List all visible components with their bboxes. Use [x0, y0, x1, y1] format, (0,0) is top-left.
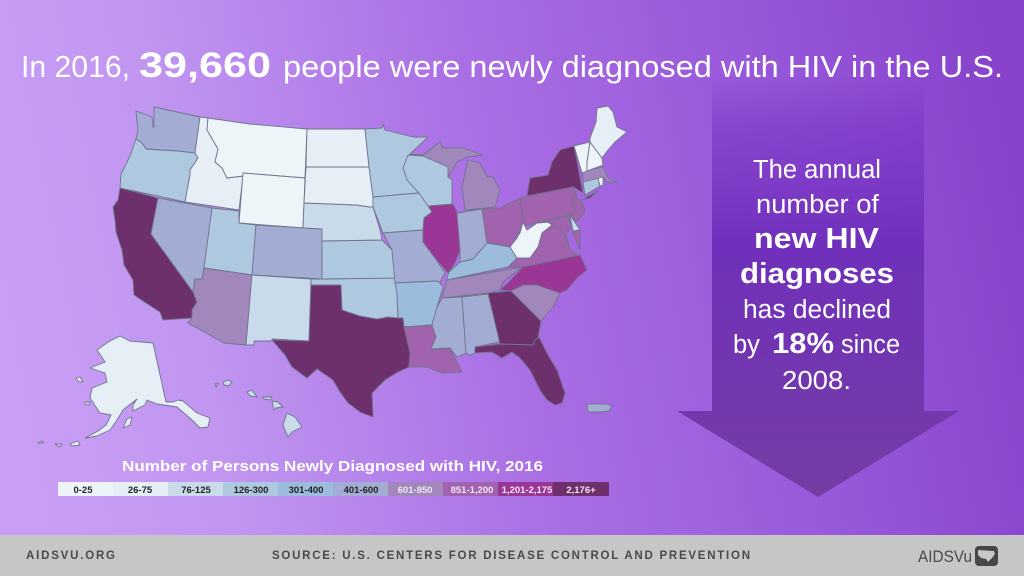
state: Alabama [462, 294, 500, 355]
territory: Puerto Rico [587, 404, 612, 412]
state: New Hampshire [587, 142, 603, 171]
islands: Alaska [38, 377, 132, 447]
state: New Jersey [570, 195, 585, 222]
state: Ohio [482, 198, 523, 247]
title: In 2016, [21, 49, 130, 84]
callout: annual decline: number of [756, 191, 880, 219]
state: Nevada [151, 198, 212, 292]
legend: 76-125 [181, 485, 212, 496]
legend: 2,176+ [566, 485, 596, 496]
state: Iowa [373, 193, 432, 233]
down arrow [677, 75, 959, 497]
callout: annual decline: has declined [743, 296, 891, 324]
state: Illinois [423, 204, 460, 273]
state: Maine [590, 106, 627, 158]
title [21, 46, 1003, 85]
state: Arizona [188, 268, 252, 345]
state: North Dakota [306, 129, 369, 167]
state: Louisiana [404, 325, 462, 373]
state: Colorado [252, 225, 322, 279]
state: Michigan [410, 142, 500, 210]
state: Wisconsin [403, 155, 452, 206]
legend: 601-850 [398, 485, 432, 496]
state: Minnesota [365, 124, 428, 197]
state: Nebraska [303, 203, 382, 241]
footer bar [0, 535, 1024, 576]
state: Rhode Island [598, 177, 603, 186]
state: Wyoming [239, 173, 305, 228]
legend: 26-75 [128, 485, 153, 496]
legend: 0-25 [73, 485, 93, 496]
title: 39,660 [139, 46, 271, 85]
state: Idaho [185, 117, 243, 210]
state: Utah [204, 208, 256, 275]
legend title: Number of Persons Newly Diagnosed with HIV, 2016 [122, 458, 543, 475]
state: Florida [475, 337, 565, 405]
state: Oklahoma [311, 278, 398, 319]
state: South Dakota [304, 167, 373, 207]
legend: 301-400 [289, 485, 323, 496]
footer: source: SOURCE: U.S. CENTERS FOR DISEASE CONTROL AND PREVENTION [272, 550, 750, 562]
legend: 126-300 [234, 485, 268, 496]
callout: annual decline: since [841, 331, 900, 359]
callout: annual decline: 18% [772, 328, 834, 360]
callout: annual decline: by [733, 331, 760, 359]
state: Pennsylvania [520, 187, 577, 226]
state: California [113, 188, 197, 320]
footer: website: AIDSVU.ORG [26, 550, 115, 562]
state: Oregon [120, 139, 198, 202]
legend: 851-1,200 [451, 485, 493, 496]
legend: 401-600 [344, 485, 378, 496]
state: West Virginia [510, 222, 552, 258]
callout: annual decline [733, 156, 900, 395]
state: Massachusetts [583, 167, 617, 182]
state: Washington [136, 107, 200, 153]
state: Texas [272, 285, 410, 417]
state: New York [527, 146, 583, 196]
state: Missouri [383, 230, 445, 287]
state: Mississippi [431, 297, 466, 357]
legend [58, 482, 609, 496]
callout: annual decline: diagnoses [740, 258, 894, 290]
state: Georgia [488, 291, 541, 345]
callout: annual decline: 2008. [782, 367, 851, 395]
state: Maryland [537, 216, 580, 250]
map: United States HIV diagnoses by state [38, 106, 627, 447]
state: Indiana [457, 209, 487, 262]
state: Tennessee [442, 267, 522, 298]
callout: annual decline: The annual [753, 156, 881, 184]
legend: 1,201-2,175 [502, 485, 553, 496]
state: Hawaii [215, 380, 302, 437]
callout: annual decline: new HIV [754, 223, 880, 255]
state: North Carolina [500, 255, 587, 293]
state: New Mexico [246, 275, 311, 345]
state: Montana [207, 118, 307, 178]
state: Connecticut [583, 178, 600, 195]
title: people were newly diagnosed with HIV in the U.S. [283, 49, 1003, 84]
logo: AIDSVu: AIDSVu [918, 547, 972, 566]
state: Delaware [570, 215, 580, 231]
state: Long Island [582, 191, 598, 200]
state: Virginia [508, 225, 578, 267]
state: Vermont [574, 142, 590, 173]
state: Alaska [85, 336, 210, 438]
state: Kentucky [447, 243, 517, 280]
state: South Carolina [511, 285, 560, 321]
state: Arkansas [395, 281, 443, 327]
state: Kansas [322, 240, 395, 279]
